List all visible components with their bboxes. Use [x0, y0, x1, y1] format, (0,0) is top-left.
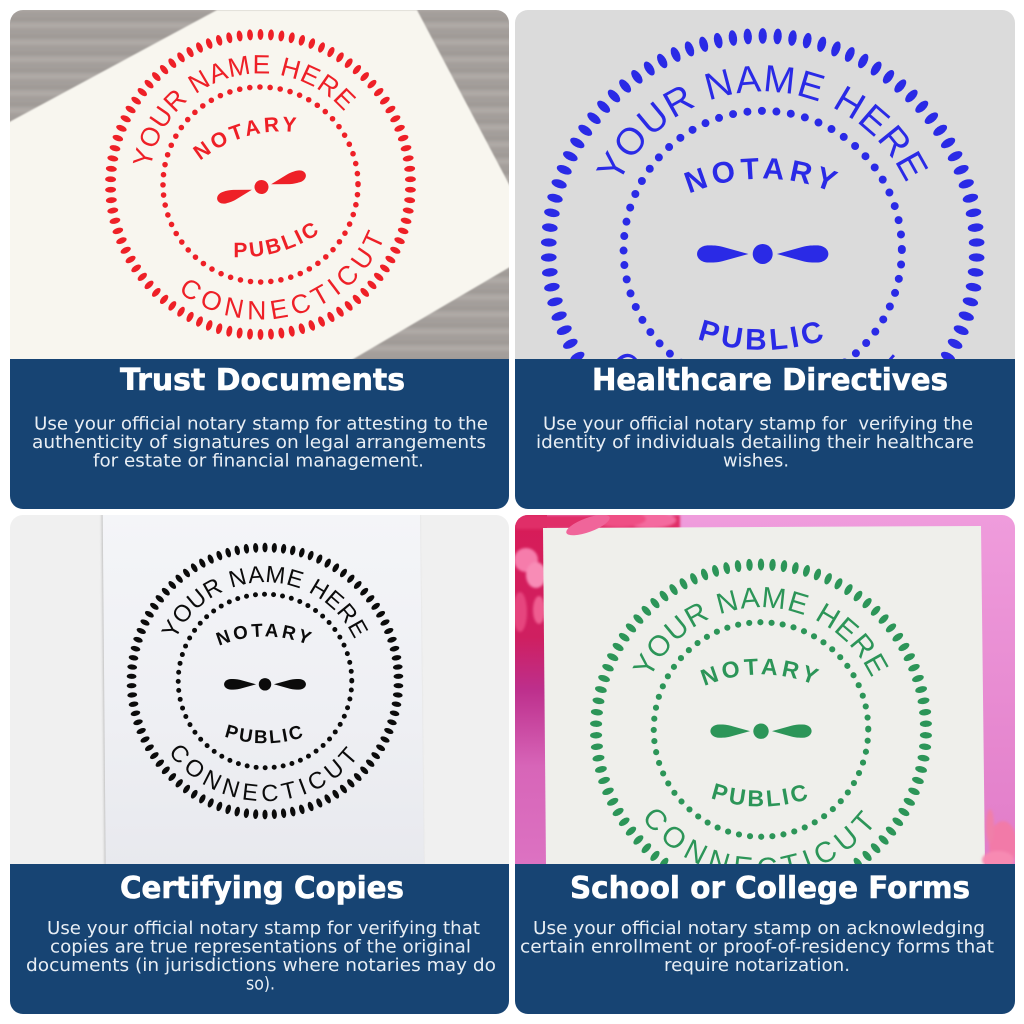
heading: School or College Forms — [570, 871, 970, 906]
stamp: red notary seal: NOTARY — [192, 116, 296, 160]
flowers: bottom right — [982, 809, 1017, 869]
description: for estate or financial management. — [93, 452, 424, 472]
stamp: blue notary seal: PUBLIC — [698, 320, 823, 350]
stamp: red notary seal: YOUR NAME HERE — [132, 55, 356, 164]
stamp: green notary seal — [590, 558, 932, 864]
stamp: blue notary seal — [540, 28, 984, 359]
stamp: green notary seal: PUBLIC — [712, 783, 808, 806]
panel: School or College Forms — [515, 515, 1015, 1014]
description: so). — [246, 974, 275, 994]
caption panel — [515, 359, 1015, 509]
flowers: top left — [513, 511, 680, 632]
photo: stamped paper on pink background — [515, 515, 1015, 864]
stamp: blue notary seal: CONNECTICUT — [617, 354, 895, 359]
photo: stamped paper on white planks — [10, 515, 509, 864]
stamp: black notary seal: NOTARY — [216, 624, 312, 646]
description — [520, 919, 994, 976]
stamp: blue notary seal: NOTARY — [684, 158, 838, 193]
photo: stamped paper on wood — [10, 10, 509, 359]
description: certain enrollment or proof-of-residency forms that — [520, 938, 994, 958]
stamp: black notary seal: CONNECTICUT — [172, 746, 355, 802]
panel: Certifying Copies — [10, 515, 509, 1014]
stamp: green notary seal: NOTARY — [700, 658, 820, 686]
description — [538, 416, 973, 467]
photo: stamped grey paper — [515, 10, 1015, 359]
panel: Trust Documents — [10, 10, 509, 509]
description: documents (in jurisdictions where notaries may do — [26, 956, 496, 976]
description: wishes. — [723, 452, 789, 472]
stamp: red notary seal — [105, 29, 416, 340]
stamp: red notary seal: CONNECTICUT — [182, 230, 382, 320]
stamp: red notary seal: PUBLIC — [234, 223, 318, 258]
description — [26, 919, 496, 994]
description: identity of individuals detailing their healthcare — [536, 433, 974, 453]
stamp: black notary seal: YOUR NAME HERE — [161, 566, 368, 638]
heading: Certifying Copies — [120, 871, 404, 906]
description — [32, 414, 488, 472]
panel: Healthcare Directives — [515, 10, 1015, 509]
description: Use your official notary stamp for verifying the — [543, 414, 973, 434]
description: require notarization. — [664, 956, 850, 976]
description: Use your official notary stamp on acknowledging — [533, 919, 985, 939]
description: copies are true representations of the original — [50, 938, 471, 958]
stamp: black notary seal — [126, 542, 404, 820]
description: Use your official notary stamp for attesting to the — [34, 414, 488, 434]
description: Use your official notary stamp for verifying that — [47, 919, 480, 939]
heading: Healthcare Directives — [592, 363, 948, 398]
stamp: black notary seal: PUBLIC — [225, 724, 302, 744]
stamp: green notary seal: YOUR NAME HERE — [632, 587, 889, 677]
stamp: green notary seal: CONNECTICUT — [646, 810, 872, 864]
caption panel — [10, 359, 509, 509]
caption panel — [515, 864, 1015, 1014]
heading: Trust Documents — [120, 363, 405, 398]
stamp: blue notary seal: YOUR NAME HERE — [596, 65, 928, 182]
description: authenticity of signatures on legal arrangements — [32, 433, 486, 453]
caption panel — [10, 864, 509, 1014]
